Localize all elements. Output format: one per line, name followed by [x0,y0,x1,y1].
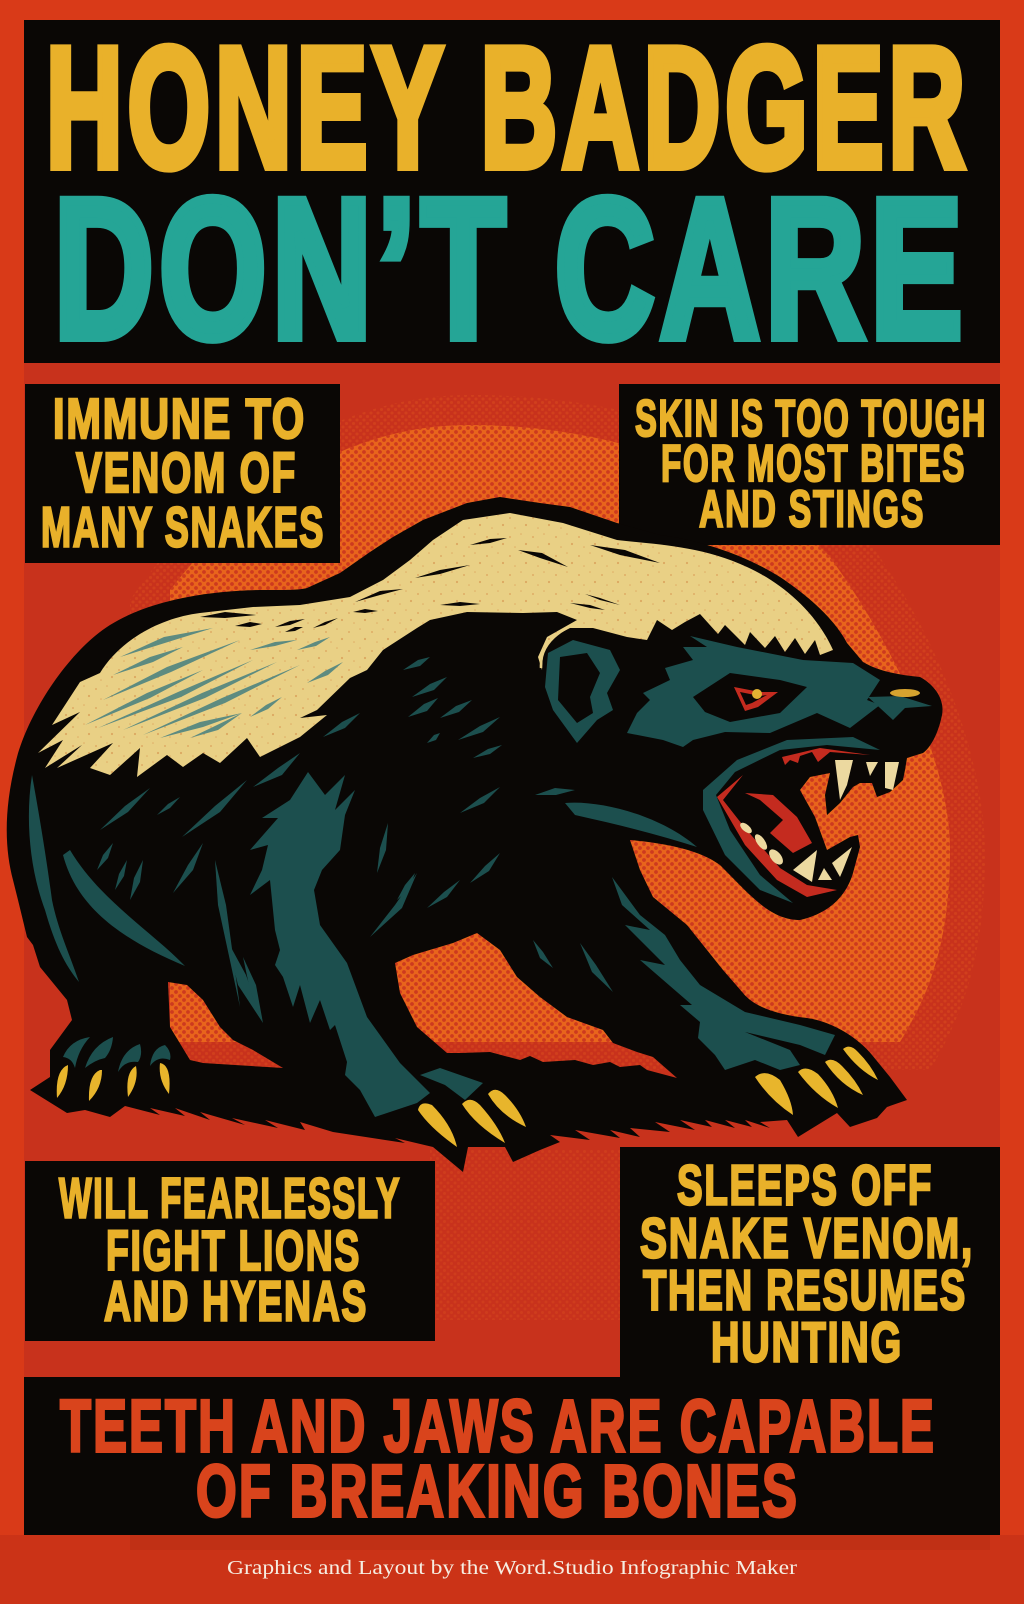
bottom banner: OF BREAKING BONES [196,1450,799,1532]
middle foot claws [418,1090,526,1147]
rear toes [63,1037,170,1072]
rear foot claws [57,1063,170,1101]
claws [57,1047,878,1147]
footer credit: Graphics and Layout by the Word.Studio Infographic Maker [227,1557,797,1579]
callout box: sleeps off venom [620,1147,1000,1378]
rear thigh stripe [63,850,185,966]
front arm [612,877,835,1070]
front foot claws [755,1047,878,1115]
ear inner [558,653,600,723]
outer halftone glow [130,395,985,1070]
mantle teal-grey fur streaks [85,628,343,738]
honey badger illustration [7,497,943,1172]
neck stripe under jaw [565,803,697,847]
badger cream mantle [38,513,833,777]
eye [734,687,778,711]
cheek and muzzle [627,636,880,747]
callout box: venom immunity: VENOM OF [76,441,297,505]
callout box: venom immunity: MANY SNAKES [41,496,325,560]
ground halftone [430,1150,620,1320]
sun halo with halftone [170,425,950,1042]
mantle dark fur strokes [200,538,660,632]
ear [545,640,620,743]
title panel [24,12,1000,379]
bottom banner [24,1377,1000,1535]
teeth and fangs [738,760,899,882]
callout box: venom immunity [25,384,340,563]
body fur strokes [403,657,430,670]
callout box: fights lions and hyenas: WILL FEARLESSLY [59,1166,401,1230]
callout box: tough skin [619,384,1000,545]
badger black silhouette [7,497,943,1172]
nose [868,689,932,720]
callout box: fights lions and hyenas: FIGHT LIONS [106,1219,361,1283]
callout box: sleeps off venom: HUNTING [711,1310,903,1374]
ear highlight [541,624,575,668]
left flank stripe [29,775,79,982]
shoulder and front-left leg [250,772,430,1117]
footer strip [0,1535,1024,1604]
mid paw [420,1068,483,1100]
callout box: fights lions and hyenas: AND HYENAS [104,1270,368,1334]
badger teal fur [29,636,880,1117]
callout box: venom immunity: IMMUNE TO [53,387,306,451]
eye socket [693,673,807,722]
mouth: gums, lip, tongue [717,748,870,897]
muzzle lip [703,737,880,903]
callout box: fights lions and hyenas [25,1161,435,1341]
